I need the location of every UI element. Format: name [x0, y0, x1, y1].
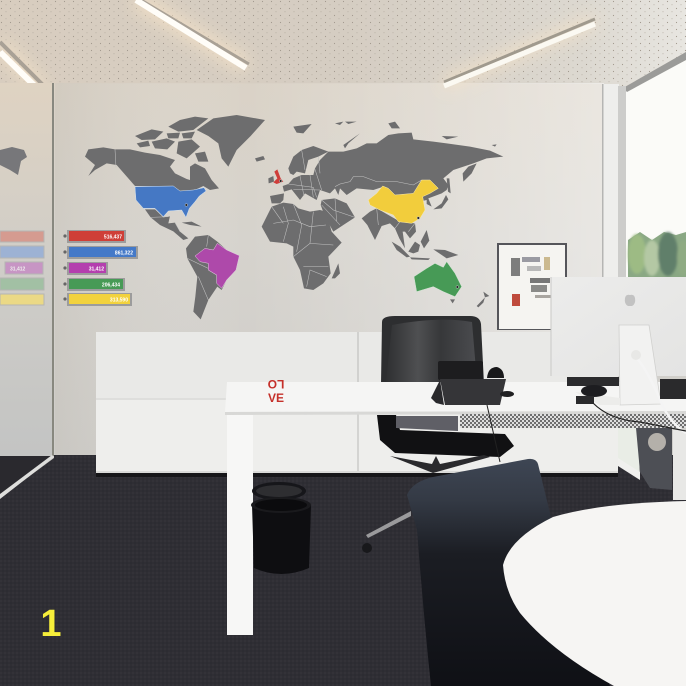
world map — [85, 115, 503, 319]
right column — [602, 84, 619, 334]
Alaska and Canada — [85, 147, 219, 192]
trees — [628, 232, 686, 277]
waste bins — [251, 482, 311, 574]
ceiling lights — [0, 0, 595, 92]
LOVE sculpture — [268, 377, 284, 405]
mirror floor edge — [0, 455, 54, 499]
monitor — [551, 277, 686, 433]
Kamchatka — [463, 163, 477, 182]
gray land — [85, 115, 503, 319]
mirror floor — [0, 458, 54, 686]
United Kingdom — [273, 169, 283, 184]
LOVE sculpture: LO — [268, 377, 284, 391]
Ireland — [268, 176, 274, 183]
Iceland — [255, 156, 265, 162]
China — [368, 180, 438, 223]
framed poster — [497, 243, 567, 330]
bar: red: 516,437 — [104, 234, 122, 240]
round table — [503, 501, 686, 686]
number label: 1 — [40, 603, 62, 645]
visitor chair — [407, 459, 610, 686]
Africa — [262, 203, 342, 290]
keyboard and mouse — [567, 377, 686, 431]
floor — [54, 455, 686, 686]
ceiling — [0, 0, 686, 88]
bar: yellow: 313,590 — [110, 298, 128, 304]
bar: green: 206,434 — [102, 282, 120, 288]
Greenland — [197, 115, 265, 167]
Australia — [414, 262, 462, 297]
LOVE sculpture: VE — [268, 391, 284, 405]
desk phone — [431, 361, 514, 462]
desk — [225, 382, 686, 635]
Europe and Russia — [283, 133, 503, 207]
bar: blue: 861,322 — [115, 250, 133, 256]
Middle East — [321, 198, 355, 232]
window — [618, 52, 686, 280]
apple logo — [625, 295, 635, 306]
Central America — [145, 209, 188, 240]
Brazil — [195, 243, 239, 288]
India and Southeast Asia — [362, 208, 416, 248]
white cabinet — [96, 332, 618, 477]
mirrored bars — [0, 231, 44, 305]
mirrored bars: 31,412 — [10, 266, 26, 272]
country borders — [115, 149, 422, 300]
mirrored map fragment — [0, 147, 27, 175]
Southeast Asia islands — [392, 242, 410, 257]
office chair — [362, 316, 514, 553]
South America — [186, 235, 239, 319]
location markers — [185, 180, 459, 288]
Iberia — [270, 193, 284, 203]
left mirror panel — [0, 83, 54, 496]
Arctic islands — [168, 117, 208, 132]
bar chart legend — [63, 230, 138, 306]
Scandinavia — [288, 146, 328, 175]
bar: magenta: 31,412 — [89, 266, 104, 272]
USA — [135, 186, 206, 217]
Japan and Sakhalin — [433, 195, 448, 209]
monitor stand — [619, 325, 661, 405]
wall shading — [55, 83, 604, 455]
window lower section with portrait — [618, 428, 686, 500]
chair base leg — [366, 511, 411, 538]
